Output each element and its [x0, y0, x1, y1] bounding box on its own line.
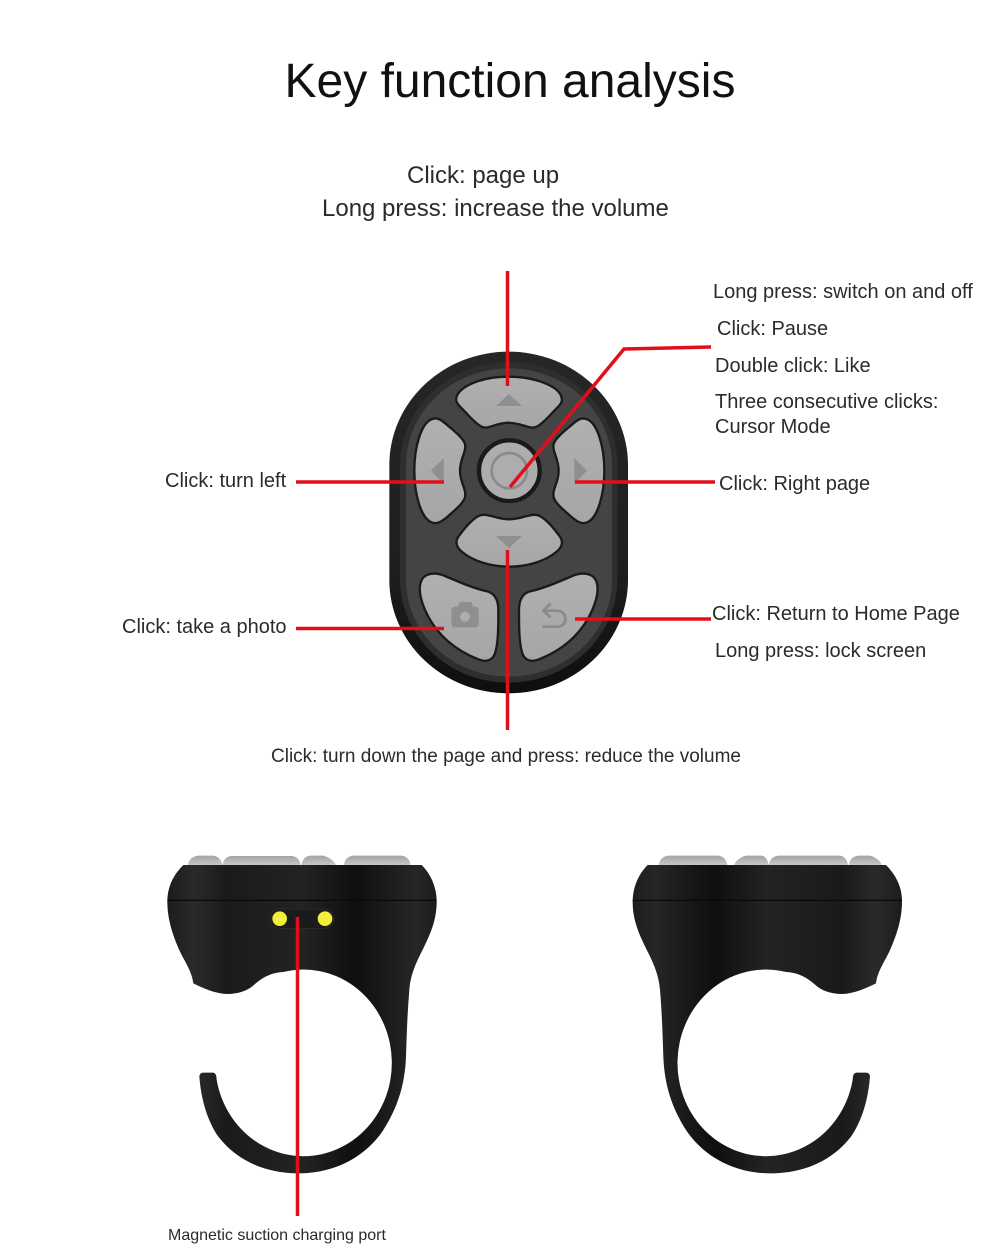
label: up key: Click: page up [407, 162, 559, 189]
arrow: camera key [296, 627, 444, 630]
label: down key: Click: turn down the page and press: reduce the volume [271, 746, 741, 767]
ring with charging port [167, 856, 437, 1173]
label: centre key: Double click: Like [715, 355, 871, 377]
left key [414, 418, 465, 523]
icon: centre ring [492, 453, 527, 488]
up key [456, 377, 562, 428]
remote bezel [400, 362, 617, 683]
icon: left triangle [431, 458, 444, 484]
down key [456, 515, 562, 567]
seam line [633, 900, 902, 901]
label: up key [322, 162, 669, 222]
title: Key function analysis [285, 55, 735, 108]
return key [519, 574, 598, 661]
label: return key: Click: Return to Home Page [712, 603, 960, 625]
label: centre key: Cursor Mode [715, 416, 831, 438]
icon: return arrow [543, 603, 565, 627]
charging port [270, 909, 334, 928]
label: charging port: Magnetic suction charging port [168, 1227, 386, 1244]
label: centre key: Three consecutive clicks: [715, 391, 938, 413]
icon: down triangle [496, 536, 522, 548]
remote face plate [406, 368, 612, 677]
camera key [420, 574, 498, 661]
icon: camera [451, 602, 479, 627]
arrow: up key [506, 271, 509, 386]
top keys [659, 856, 882, 865]
remote body [389, 352, 628, 693]
seam line [167, 900, 437, 901]
ring body [633, 865, 902, 1173]
icon: up triangle [496, 394, 522, 406]
label: left key: Click: turn left [165, 470, 287, 492]
remote control, top view [389, 352, 628, 693]
right key [553, 418, 604, 523]
icon: left contact [272, 911, 287, 926]
ring body [167, 865, 437, 1173]
label: centre key: Long press: switch on and off [713, 281, 973, 303]
label: centre key: Click: Pause [717, 318, 828, 340]
arrow: return key [575, 617, 711, 621]
arrows: red leader lines [296, 271, 715, 1216]
centre key [479, 440, 540, 501]
label: camera key: Click: take a photo [122, 616, 287, 638]
label: up key: Long press: increase the volume [322, 195, 669, 222]
label: return key: Long press: lock screen [715, 640, 926, 662]
arrow: charging port [296, 917, 299, 1216]
label: centre key [713, 281, 973, 438]
arrow: centre key [510, 347, 711, 487]
ring, back view [633, 856, 902, 1173]
label: return key [712, 603, 960, 662]
top keys [188, 856, 411, 865]
label: right key: Click: Right page [719, 473, 870, 495]
icon: right triangle [574, 458, 587, 484]
arrow: right key [575, 480, 715, 484]
arrow: left key [296, 480, 444, 484]
icon: right contact [318, 911, 332, 926]
arrow: down key [506, 550, 509, 730]
